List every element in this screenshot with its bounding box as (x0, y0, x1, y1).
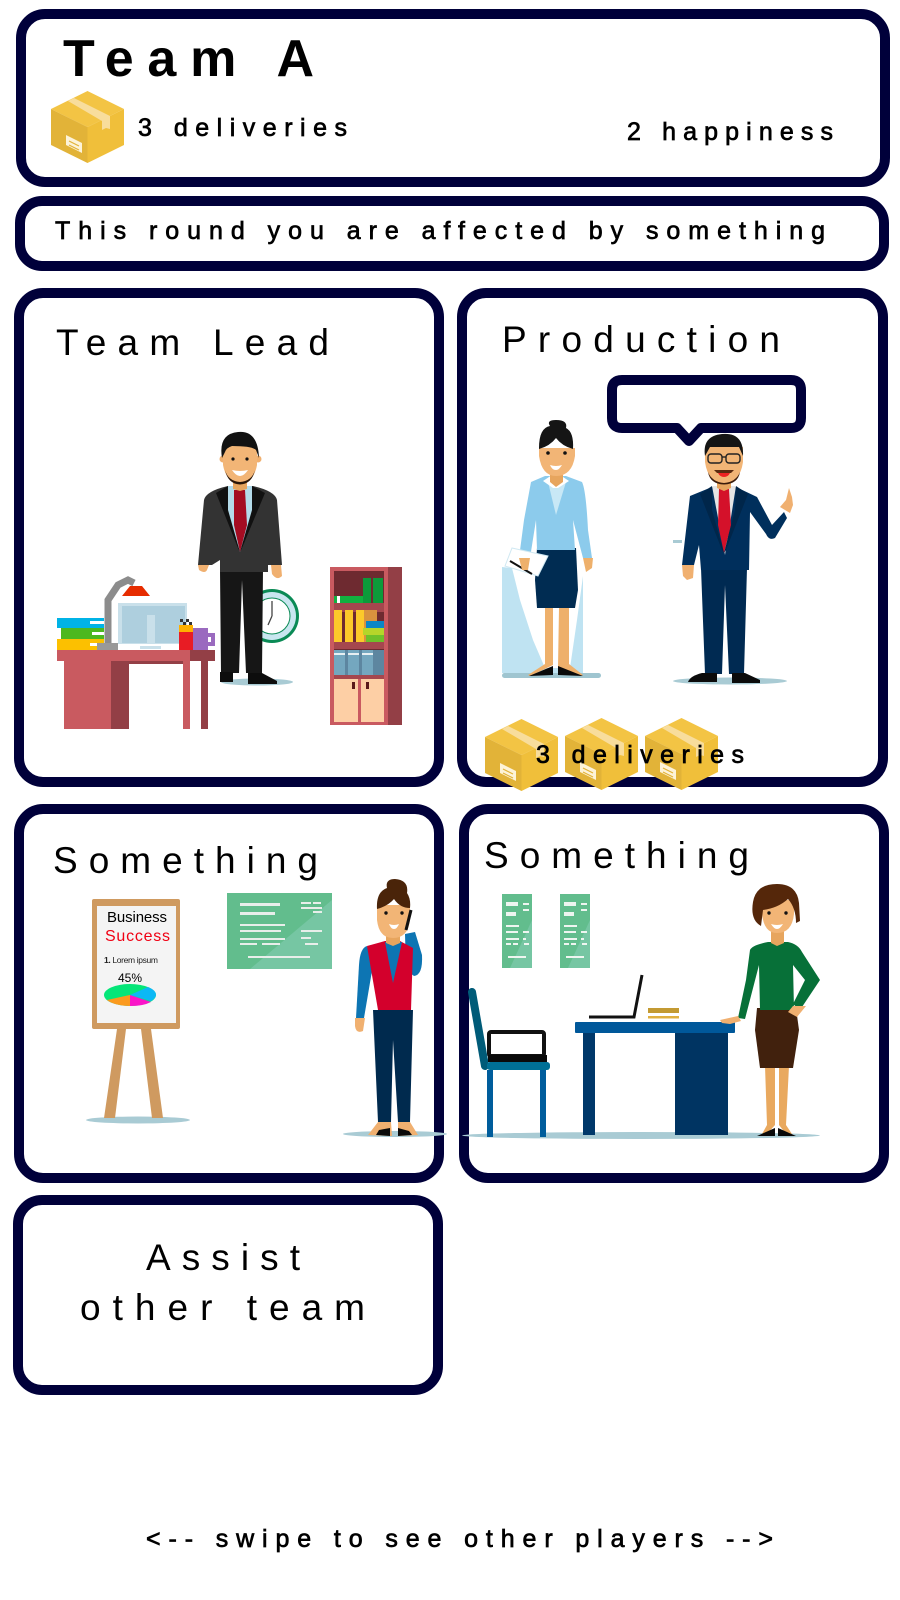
panel: something left (19, 809, 447, 1178)
illustration: wall clock (245, 589, 299, 643)
speech bubble (612, 380, 801, 441)
illustration: chair with laptop (472, 992, 550, 1137)
illustration: green wall board (227, 893, 332, 969)
heading: Something: Something (53, 840, 318, 881)
panel: team header (21, 14, 885, 182)
heading: Production: Production (502, 319, 780, 360)
panel: assist other team (18, 1200, 438, 1390)
panel: team lead (19, 293, 439, 782)
illustration: woman on phone (343, 879, 447, 1137)
illustration: business success easel: 45% (118, 971, 142, 985)
illustration: desk with laptop (575, 975, 735, 1135)
illustration: wall papers (502, 894, 590, 968)
button label: Assist other team (80, 1237, 365, 1328)
panel: round banner (20, 201, 884, 266)
panel: production (462, 293, 883, 791)
icon: delivery box (51, 91, 124, 163)
illustration: business success easel (86, 899, 190, 1124)
button label: Assist other team: other team (80, 1287, 365, 1328)
illustration: man in navy suit (673, 434, 793, 684)
banner text: This round you are affected by something (55, 217, 825, 245)
illustration: floor shadow (462, 1132, 820, 1139)
illustration: office desk with books, lamp and monitor (57, 580, 215, 729)
button label: Assist other team: Assist (146, 1237, 301, 1278)
illustration: woman with clipboard (502, 420, 601, 678)
happiness count: 2 happiness (627, 118, 833, 146)
illustration: team lead man (198, 432, 293, 686)
illustration: business success easel: 1. Lorem ipsum (104, 955, 158, 965)
illustration: woman in green (720, 884, 820, 1136)
heading: Team A: Team A (63, 30, 314, 88)
icons: three delivery boxes (485, 718, 718, 791)
production deliveries count: 3 deliveries (536, 741, 744, 769)
illustration: bookshelf (330, 567, 402, 725)
heading: Team Lead: Team Lead (56, 322, 329, 363)
panel: something right (462, 809, 884, 1178)
illustration: business success easel: Success (105, 928, 170, 945)
swipe hint: <-- swipe to see other players --> (146, 1525, 773, 1553)
illustration: business success easel: Business (107, 909, 167, 926)
heading: Something: Something (484, 835, 749, 876)
deliveries count: 3 deliveries (138, 114, 347, 142)
